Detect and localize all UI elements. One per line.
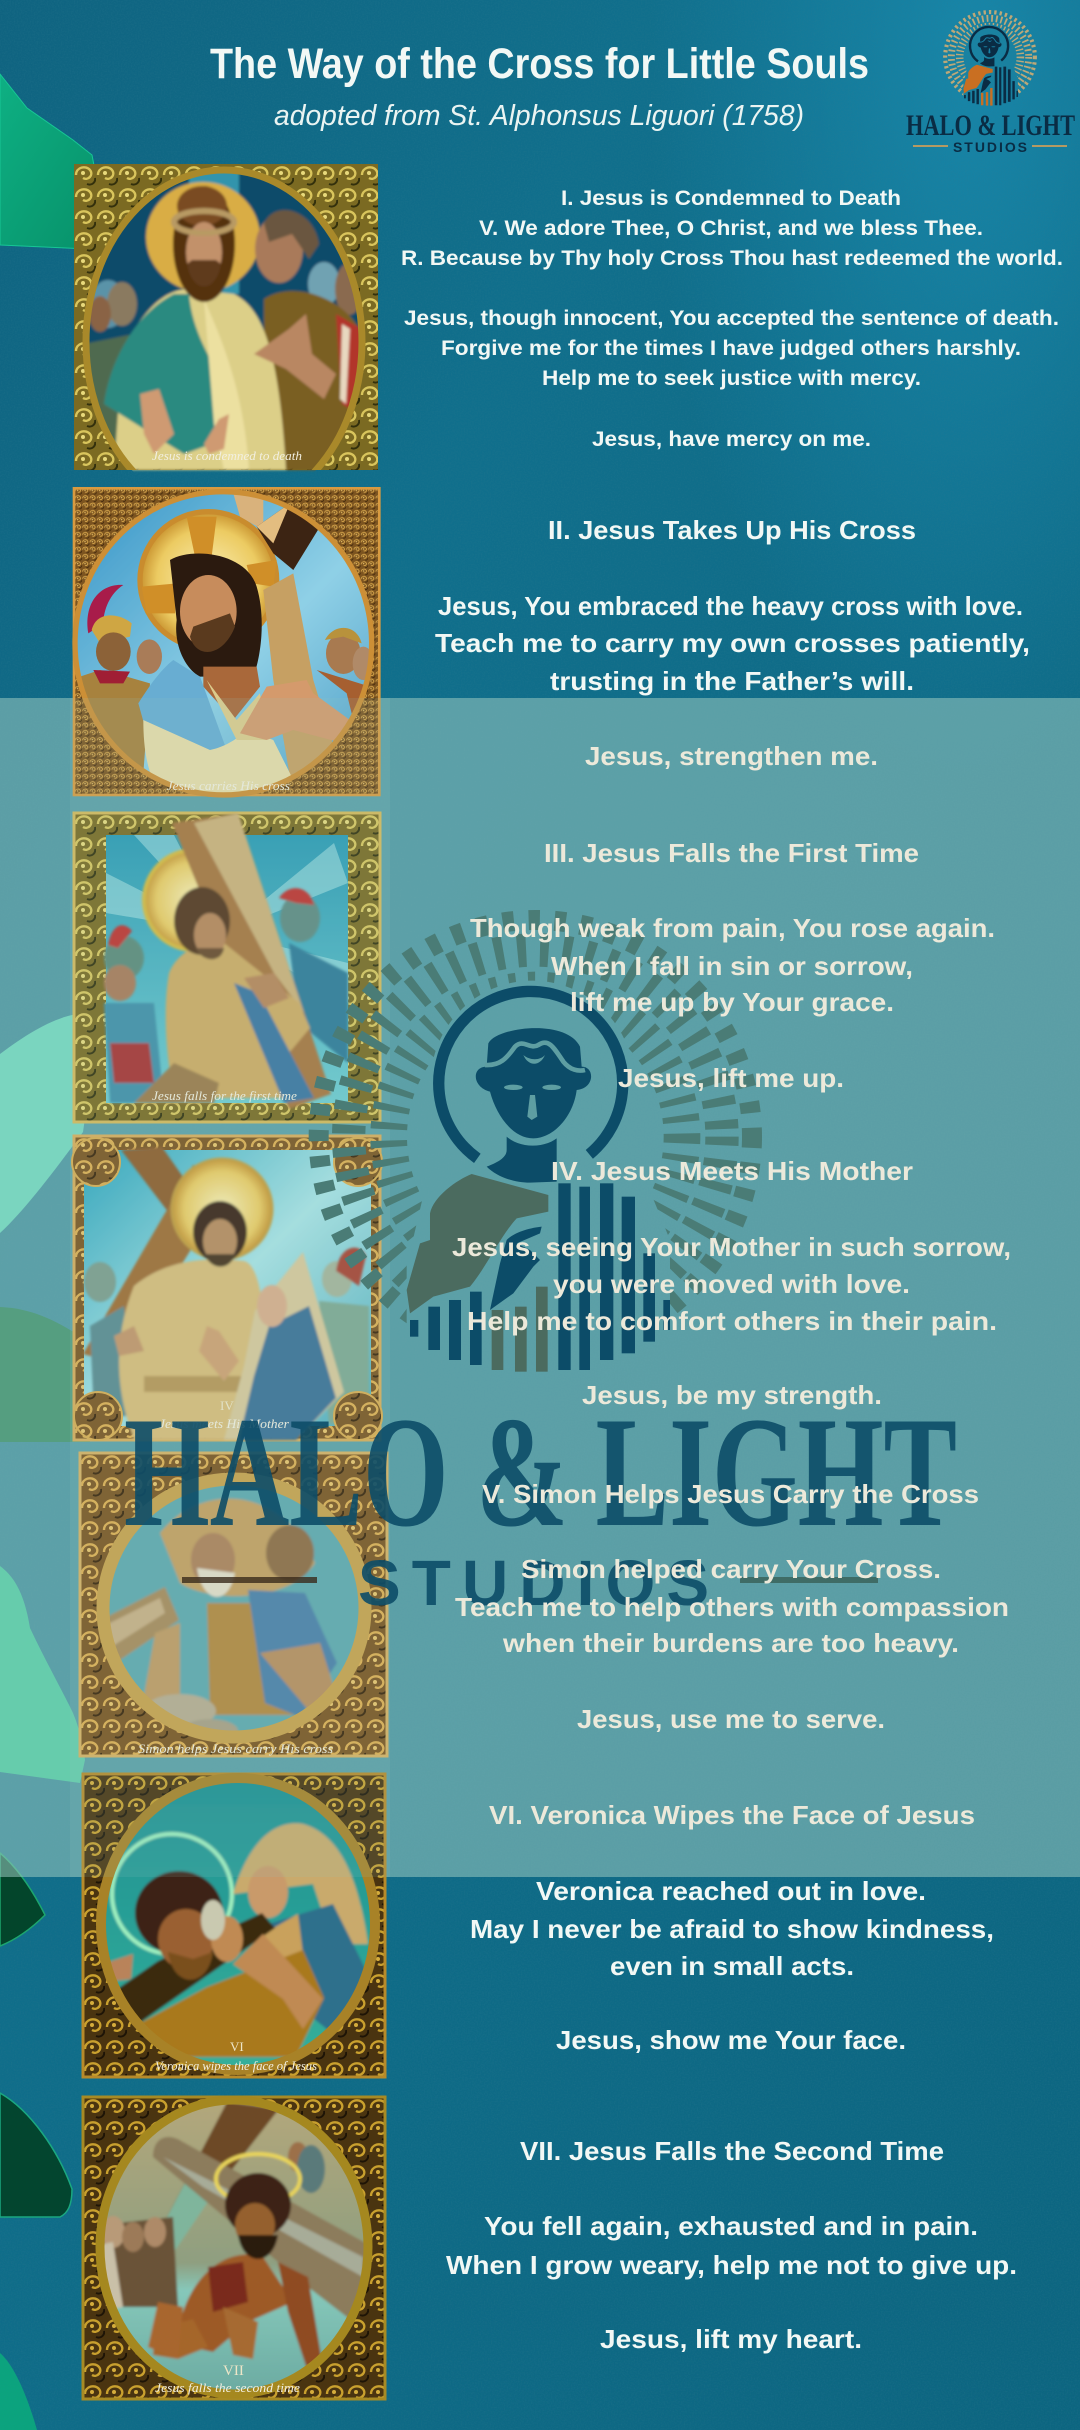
painting: Station III, Jesus falls the first time [74,813,380,1122]
text: Station VII: VII. Jesus Falls the Second Time [520,2136,944,2166]
leaf 6 [0,2093,72,2217]
text: Station VI: Veronica reached out in love. [536,1876,926,1906]
text: Station V [455,1479,1009,1734]
text: Station III: III. Jesus Falls the First Time [544,838,919,868]
text: Station III: Jesus, lift me up. [618,1063,844,1093]
studio logo, top right [906,10,1075,155]
text: Station IV: Help me to comfort others in their pain. [467,1306,997,1336]
text: Station VI: May I never be afraid to show kindness, [470,1914,994,1944]
text: Station IV [452,1156,1011,1410]
text: Station III [470,838,995,1093]
text: Station III: lift me up by Your grace. [570,987,894,1017]
leaf 5 [0,1853,45,1946]
text: Station III: When I fall in sin or sorrow, [551,951,913,981]
caption: Jesus falls for the first time [152,1088,297,1103]
text: Station IV: you were moved with love. [553,1269,910,1299]
painting: Station VII, Jesus falls the second time [83,2097,385,2399]
logo sub-wordmark: STUDIOS [953,139,1027,155]
text: Station V: Jesus, use me to serve. [577,1704,885,1734]
light wash over the paintings inside the band [70,698,390,1877]
text: Station I: Jesus, though innocent, You accepted the sentence of death. [404,307,1059,330]
caption: Jesus carries His cross [167,779,290,793]
caption: Jesus meets His Mother [159,1416,290,1431]
text: Station II: Teach me to carry my own crosses patiently, [435,628,1030,658]
caption: Simon helps Jesus carry His cross [138,1741,333,1756]
text: Station VI: VI. Veronica Wipes the Face of Jesus [489,1800,975,1830]
text: Station II: Jesus, You embraced the heavy cross with love. [438,591,1023,621]
text: Station II: II. Jesus Takes Up His Cross [548,515,916,545]
watermark: STUDIOS: STUDIOS [358,1547,709,1619]
watermark wordmark [124,1385,957,1619]
caption: Jesus falls the second time [155,2380,300,2395]
caption: Veronica wipes the face of Jesus [155,2058,317,2073]
subtitle: adopted from St. Alphonsus Liguori (1758) [274,100,804,132]
text: Station II [435,515,1030,771]
text: Station IV: IV. Jesus Meets His Mother [551,1156,913,1186]
text: Station VI [470,1800,994,2055]
painting: Station VI, Veronica wipes the face of Jesus [83,1774,385,2077]
text: Station I: Jesus, have mercy on me. [592,428,871,451]
text: Station VI: even in small acts. [610,1951,854,1981]
text: Station IV: Jesus, be my strength. [582,1380,882,1410]
text: Station VII: You fell again, exhausted and in pain. [484,2211,978,2241]
watermark logo: saint in halo with sunburst [319,920,752,1372]
text: Station I [401,187,1063,451]
numeral: VI [230,2039,244,2054]
title: The Way of the Cross for Little Souls [210,40,869,88]
text: Station I: Forgive me for the times I have judged others harshly. [441,337,1021,360]
text: Station II: Jesus, strengthen me. [585,741,878,771]
painting: Station II, Jesus takes up his cross [72,487,381,798]
text: Station I: Help me to seek justice with mercy. [542,367,921,390]
text: Station II: trusting in the Father’s will. [550,666,914,696]
painting: Station V, Simon helps Jesus [80,1453,387,1756]
decorative leaves along the left edge [0,74,110,2430]
text: Station VII [446,2136,1017,2354]
text: Station I: V. We adore Thee, O Christ, and we bless Thee. [479,217,983,240]
text: Station VI: Jesus, show me Your face. [556,2025,906,2055]
painting: Station IV, Jesus meets his mother [72,1136,382,1440]
text: Station I: R. Because by Thy holy Cross Thou hast redeemed the world. [401,247,1063,270]
leaf 2 [0,1015,100,1233]
numeral: IV [220,1398,234,1413]
translucent band across the middle [0,698,1080,1877]
leaf 7 [0,2353,37,2430]
text: Station III: Though weak from pain, You rose again. [470,913,995,943]
leaf 4 [0,1566,85,1783]
text: Station V: Teach me to help others with compassion [455,1592,1009,1622]
text: Station V: Simon helped carry Your Cross. [521,1554,941,1584]
numeral: VII [223,2363,244,2379]
text: Station VII: Jesus, lift my heart. [600,2324,862,2354]
painting: Station I, Jesus condemned [74,164,378,472]
text: Station I: I. Jesus is Condemned to Death [561,187,901,210]
caption: Jesus is condemned to death [152,448,302,463]
text: Station IV: Jesus, seeing Your Mother in such sorrow, [452,1232,1011,1262]
text: Station V: when their burdens are too heavy. [502,1628,959,1658]
leaf 3 [0,1307,90,1442]
text: Station VII: When I grow weary, help me not to give up. [446,2250,1017,2280]
text: Station V: V. Simon Helps Jesus Carry the Cross [482,1479,979,1509]
leaf 1 [0,74,110,250]
